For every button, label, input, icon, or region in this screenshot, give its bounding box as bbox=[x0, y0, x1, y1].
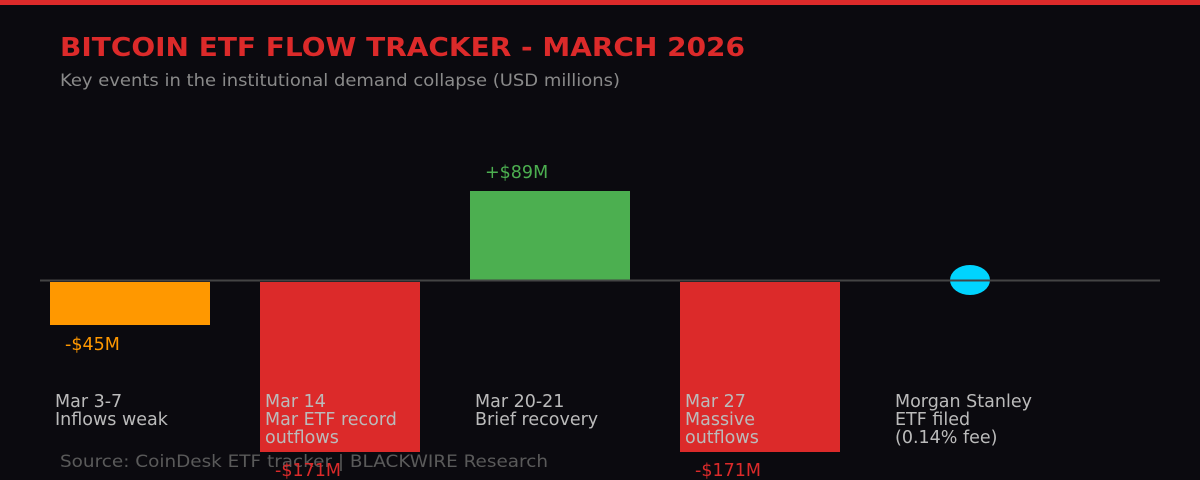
bar: Mar 27 bbox=[680, 282, 840, 452]
event labels: Mar 3-7 bbox=[55, 392, 122, 412]
event labels: ETF filed bbox=[895, 410, 970, 430]
event labels: Morgan Stanley bbox=[895, 392, 1032, 412]
event labels: Brief recovery bbox=[475, 410, 598, 430]
source note: Source: CoinDesk ETF tracker | BLACKWIRE Research bbox=[60, 452, 548, 472]
event labels: outflows bbox=[265, 428, 339, 448]
bar: Mar 3-7 bbox=[50, 282, 210, 325]
bar: Mar 14 bbox=[260, 282, 420, 452]
value labels bbox=[65, 163, 761, 480]
event labels bbox=[55, 392, 1032, 448]
marker: Morgan Stanley bbox=[950, 265, 990, 295]
event labels: Mar ETF record bbox=[265, 410, 397, 430]
top accent bar bbox=[0, 0, 1200, 5]
subtitle: Key events in the institutional demand collapse (USD millions) bbox=[60, 71, 620, 91]
bar chart bbox=[40, 163, 1160, 480]
event labels: outflows bbox=[685, 428, 759, 448]
value labels: +$89M bbox=[485, 163, 548, 183]
value labels: -$45M bbox=[65, 335, 120, 355]
event labels: Inflows weak bbox=[55, 410, 169, 430]
event labels: Mar 14 bbox=[265, 392, 326, 412]
title: BITCOIN ETF FLOW TRACKER - MARCH 2026 bbox=[60, 33, 745, 63]
event labels: Massive bbox=[685, 410, 755, 430]
event labels: (0.14% fee) bbox=[895, 428, 998, 448]
event labels: Mar 20-21 bbox=[475, 392, 564, 412]
bar: Mar 20-21 bbox=[470, 191, 630, 280]
event labels: Mar 27 bbox=[685, 392, 746, 412]
